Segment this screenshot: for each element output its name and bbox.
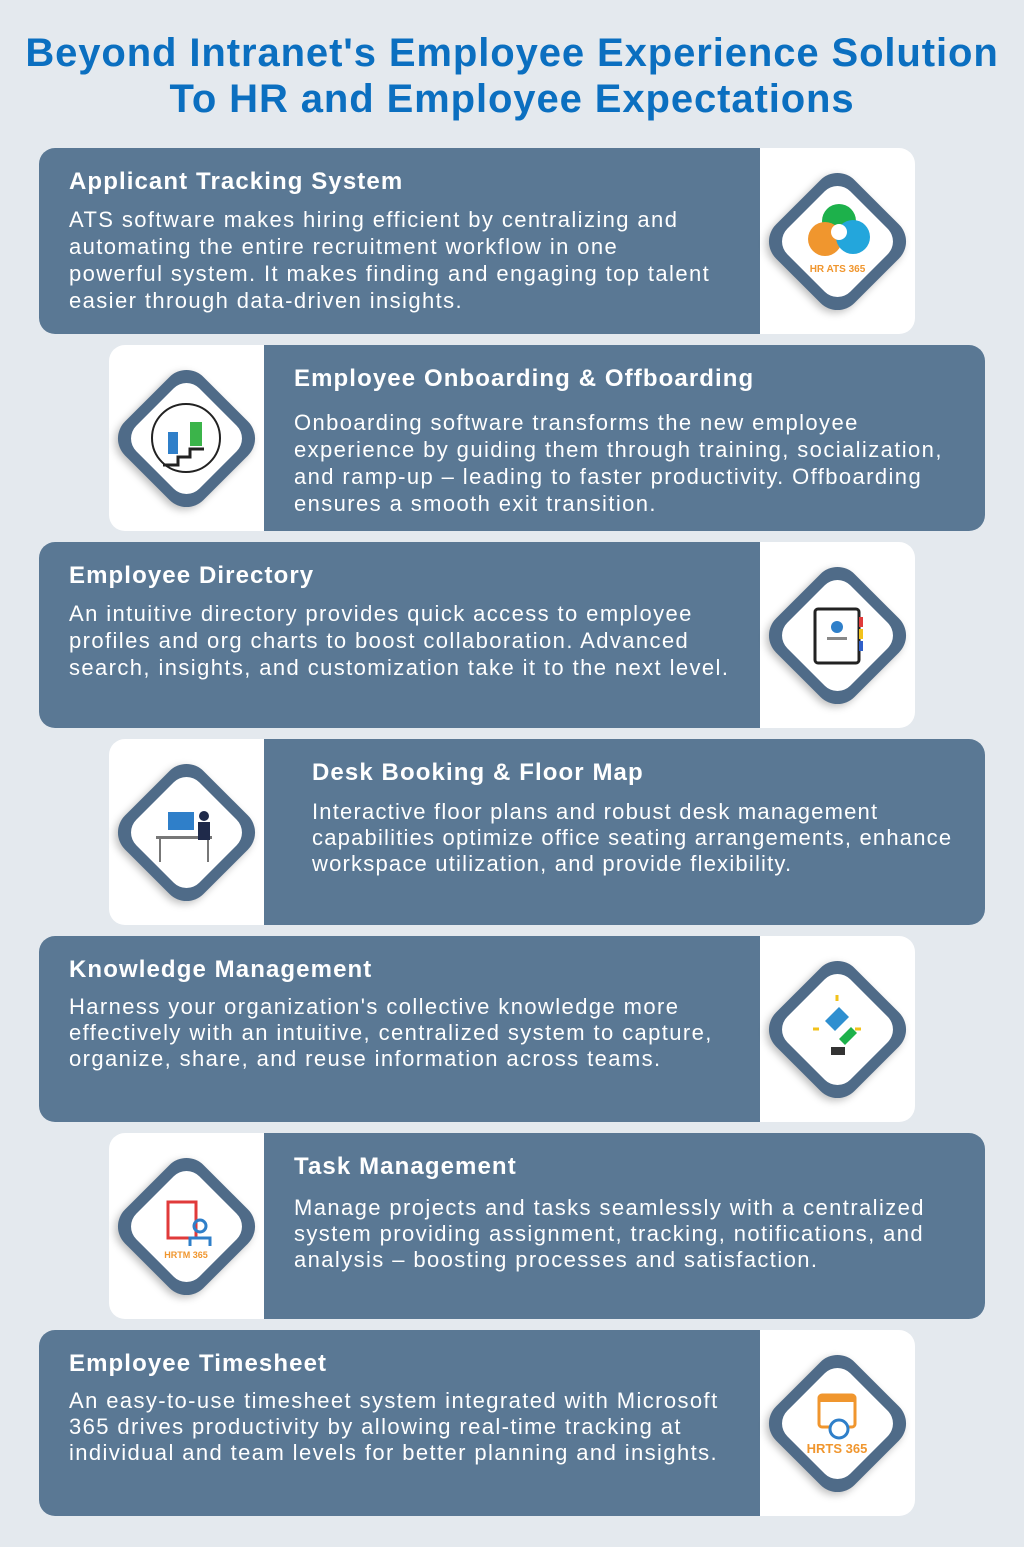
icon: directory bbox=[762, 566, 907, 711]
panel: task: system providing assignment, tracking, notifications, and bbox=[294, 1221, 924, 1246]
panel: onboarding: Onboarding software transforms the new employee bbox=[294, 410, 859, 435]
panel: timesheet bbox=[39, 1330, 915, 1516]
panel: directory: profiles and org charts to boost collaboration. Advanced bbox=[69, 628, 689, 653]
icon: onboarding bbox=[111, 369, 256, 514]
panel: onboarding: experience by guiding them through training, socialization, bbox=[294, 437, 943, 462]
title: To HR and Employee Expectations bbox=[169, 77, 855, 121]
panel: knowledge: organize, share, and reuse information across teams. bbox=[69, 1046, 662, 1071]
panel: desk booking: Interactive floor plans and robust desk management bbox=[312, 799, 878, 824]
panel: onboarding bbox=[109, 345, 985, 531]
panel: knowledge: Knowledge Management bbox=[69, 956, 372, 983]
icon: knowledge bbox=[762, 960, 907, 1105]
panel: knowledge bbox=[39, 936, 915, 1122]
panel: timesheet: An easy-to-use timesheet system integrated with Microsoft bbox=[69, 1388, 719, 1413]
panel: applicant tracking: easier through data-driven insights. bbox=[69, 288, 463, 313]
icon: task bbox=[111, 1157, 256, 1302]
panel: applicant tracking bbox=[39, 148, 915, 334]
icon: ATS bbox=[762, 172, 907, 317]
panel: directory: Employee Directory bbox=[69, 562, 314, 589]
panel: desk booking: capabilities optimize office seating arrangements, enhance bbox=[312, 825, 952, 850]
panel: onboarding: Employee Onboarding & Offboarding bbox=[294, 365, 754, 392]
panel: task: Manage projects and tasks seamlessly with a centralized bbox=[294, 1195, 925, 1220]
panel: knowledge: Harness your organization's collective knowledge more bbox=[69, 994, 679, 1019]
panel: knowledge: effectively with an intuitive, centralized system to capture, bbox=[69, 1020, 713, 1045]
panel: applicant tracking: Applicant Tracking System bbox=[69, 168, 403, 195]
panel: directory bbox=[39, 542, 915, 728]
panel: directory: search, insights, and customization take it to the next level. bbox=[69, 655, 729, 680]
panel: timesheet: 365 drives productivity by allowing real-time tracking at bbox=[69, 1414, 682, 1439]
icon: ATS: HR ATS 365 bbox=[810, 264, 866, 275]
icon: timesheet: HRTS 365 bbox=[807, 1441, 867, 1456]
panel: desk booking bbox=[109, 739, 985, 925]
panel: timesheet: Employee Timesheet bbox=[69, 1350, 327, 1377]
panel: task: Task Management bbox=[294, 1153, 517, 1180]
panel: task: analysis – boosting processes and satisfaction. bbox=[294, 1247, 818, 1272]
icon: task: HRTM 365 bbox=[164, 1250, 208, 1260]
panel: applicant tracking: automating the entire recruitment workflow in one bbox=[69, 234, 618, 259]
panel: timesheet: individual and team levels for better planning and insights. bbox=[69, 1440, 718, 1465]
panel: applicant tracking: powerful system. It makes finding and engaging top talent bbox=[69, 261, 710, 286]
title bbox=[25, 31, 999, 121]
panel: directory: An intuitive directory provides quick access to employee bbox=[69, 601, 693, 626]
panel: applicant tracking: ATS software makes hiring efficient by centralizing and bbox=[69, 207, 678, 232]
icon: desk bbox=[111, 763, 256, 908]
panel: desk booking: Desk Booking & Floor Map bbox=[312, 759, 644, 786]
panel: onboarding: ensures a smooth exit transition. bbox=[294, 491, 657, 516]
icon: timesheet bbox=[762, 1354, 907, 1499]
panel: task bbox=[109, 1133, 985, 1319]
panel: desk booking: workspace utilization, and provide flexibility. bbox=[312, 851, 792, 876]
panel: onboarding: and ramp-up – leading to faster productivity. Offboarding bbox=[294, 464, 922, 489]
title: Beyond Intranet's Employee Experience Solution bbox=[25, 31, 999, 75]
